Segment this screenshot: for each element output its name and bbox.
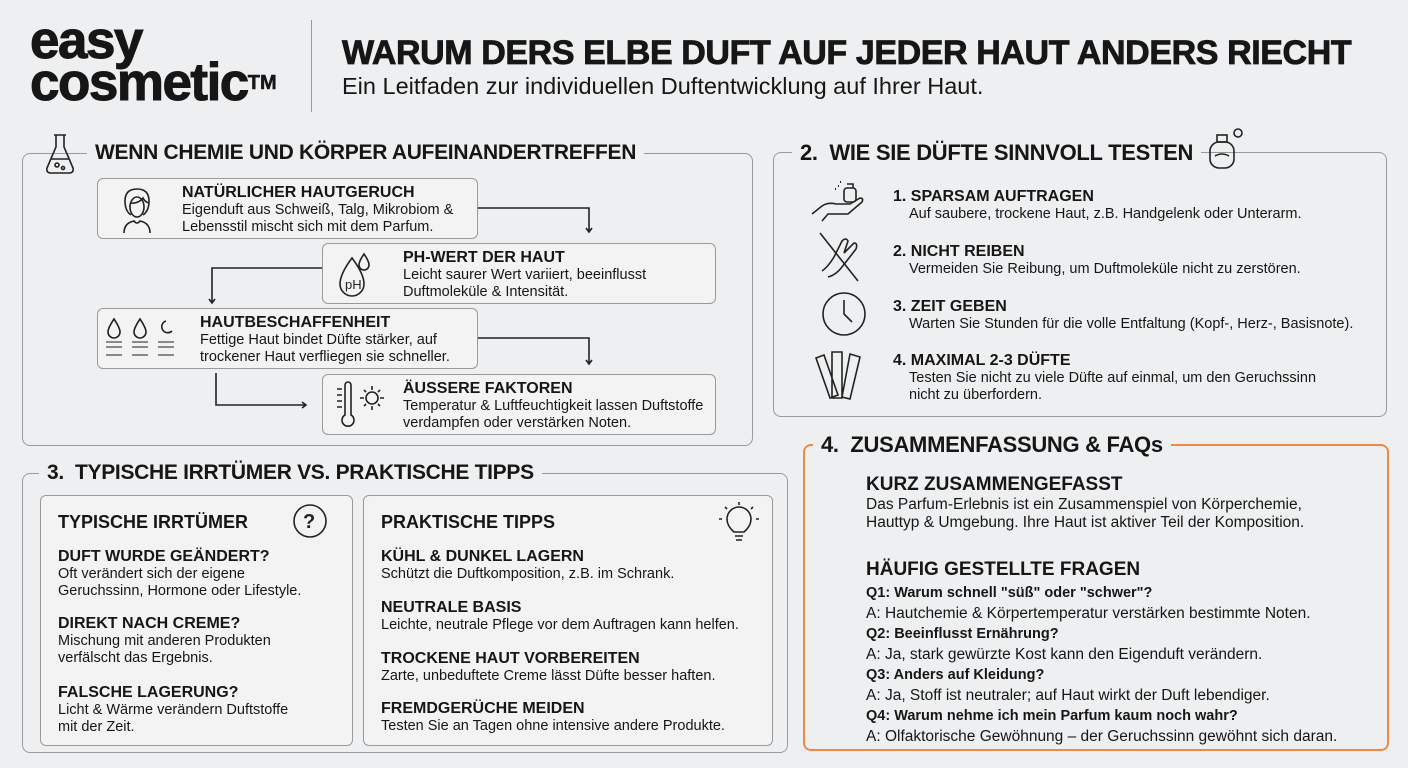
- faq: [866, 558, 1337, 744]
- step 4: [815, 351, 1316, 403]
- box: ph: PH-WERT DER HAUT: [403, 249, 565, 266]
- box: hautgeruch: Eigenduft aus Schweiß, Talg, Mikrobiom &: [182, 202, 453, 218]
- heading 2: 2. WIE SIE DÜFTE SINNVOLL TESTEN: [800, 140, 1193, 165]
- box: irrtuemer: DUFT WURDE GEÄNDERT?: [58, 548, 270, 565]
- logo: easy: [30, 11, 142, 70]
- step 1: [812, 181, 1302, 222]
- box: irrtuemer: FALSCHE LAGERUNG?: [58, 684, 238, 701]
- summary: Hauttyp & Umgebung. Ihre Haut ist aktiver Teil der Komposition.: [866, 514, 1304, 531]
- step 4: Testen Sie nicht zu viele Düfte auf einmal, um den Geruchssinn: [909, 370, 1316, 386]
- box: tipps: PRAKTISCHE TIPPS: [381, 512, 555, 532]
- summary: Das Parfum-Erlebnis ist ein Zusammenspiel von Körperchemie,: [866, 496, 1302, 513]
- box: irrtuemer: [40, 495, 353, 746]
- box: irrtuemer: Licht & Wärme verändern Duftstoffe: [58, 702, 288, 718]
- box: hautbeschaffenheit: trockener Haut verfliegen sie schneller.: [200, 349, 450, 365]
- heading 3: 3. TYPISCHE IRRTÜMER VS. PRAKTISCHE TIPPS: [47, 461, 534, 484]
- box: tipps: Testen Sie an Tagen ohne intensive andere Produkte.: [381, 718, 725, 734]
- faq: Q1: Warum schnell "süß" oder "schwer"?: [866, 585, 1152, 601]
- box: aeussere faktoren: [322, 374, 716, 435]
- faq: A: Ja, Stoff ist neutraler; auf Haut wirkt der Duft lebendiger.: [866, 686, 1270, 704]
- summary: [866, 474, 1304, 531]
- summary: KURZ ZUSAMMENGEFASST: [866, 474, 1122, 495]
- steps: [812, 181, 1353, 403]
- faq: A: Olfaktorische Gewöhnung – der Geruchssinn gewöhnt sich daran.: [866, 728, 1337, 744]
- step 1: 1. SPARSAM AUFTRAGEN: [893, 188, 1094, 205]
- box: tipps: Schützt die Duftkomposition, z.B. im Schrank.: [381, 566, 674, 582]
- panel 2: [773, 152, 1387, 417]
- box: hautbeschaffenheit: [97, 308, 478, 369]
- box: irrtuemer: Geruchssinn, Hormone oder Lifestyle.: [58, 583, 301, 599]
- box: tipps: KÜHL & DUNKEL LAGERN: [381, 548, 584, 565]
- box: tipps: Leichte, neutrale Pflege vor dem Auftragen kann helfen.: [381, 617, 739, 633]
- box: irrtuemer: DIREKT NACH CREME?: [58, 615, 240, 632]
- box: tipps: TROCKENE HAUT VORBEREITEN: [381, 650, 640, 667]
- step 3: 3. ZEIT GEBEN: [893, 298, 1007, 315]
- logo: [30, 11, 277, 112]
- box: ph: pH: [345, 277, 362, 292]
- step 4: 4. MAXIMAL 2-3 DÜFTE: [893, 352, 1070, 369]
- box: irrtuemer: mit der Zeit.: [58, 719, 135, 735]
- box: irrtuemer: TYPISCHE IRRTÜMER: [58, 512, 248, 532]
- step 3: [822, 292, 1353, 336]
- step 3: Warten Sie Stunden für die volle Entfaltung (Kopf-, Herz-, Basisnote).: [909, 316, 1353, 332]
- box: hautgeruch: Lebensstil mischt sich mit dem Parfum.: [182, 219, 433, 235]
- box: aeussere faktoren: ÄUSSERE FAKTOREN: [403, 380, 573, 397]
- step 2: 2. NICHT REIBEN: [893, 243, 1025, 260]
- box: hautgeruch: NATÜRLICHER HAUTGERUCH: [182, 184, 415, 201]
- box: hautbeschaffenheit: HAUTBESCHAFFENHEIT: [200, 314, 390, 331]
- box: irrtuemer: verfälscht das Ergebnis.: [58, 650, 213, 666]
- faq: A: Hautchemie & Körpertemperatur verstärken bestimmte Noten.: [866, 604, 1311, 622]
- box: hautbeschaffenheit: Fettige Haut bindet Düfte stärker, auf: [200, 332, 437, 348]
- faq: HÄUFIG GESTELLTE FRAGEN: [866, 559, 1140, 580]
- icon: perfume bottle: [1209, 128, 1243, 169]
- logo: cosmeticTM: [30, 53, 277, 112]
- panel 1: [22, 153, 753, 446]
- panel 3: [22, 473, 788, 753]
- box: tipps: [363, 495, 773, 746]
- box: irrtuemer: Mischung mit anderen Produkten: [58, 633, 271, 649]
- box: ph: Duftmoleküle & Intensität.: [403, 284, 568, 300]
- step 2: [819, 232, 1301, 282]
- heading 4: 4. ZUSAMMENFASSUNG & FAQs: [821, 432, 1163, 457]
- box: tipps: FREMDGERÜCHE MEIDEN: [381, 700, 585, 717]
- box: irrtuemer: Oft verändert sich der eigene: [58, 566, 245, 582]
- faq: A: Ja, stark gewürzte Kost kann den Eigenduft verändern.: [866, 646, 1262, 662]
- box: ph: Leicht saurer Wert variiert, beeinflusst: [403, 267, 646, 283]
- title: WARUM DERS ELBE DUFT AUF JEDER HAUT ANDERS RIECHT: [342, 34, 1351, 72]
- box: tipps: NEUTRALE BASIS: [381, 599, 521, 616]
- box: ph: [322, 243, 716, 304]
- faq: Q3: Anders auf Kleidung?: [866, 667, 1044, 683]
- faq: Q2: Beeinflusst Ernährung?: [866, 626, 1059, 642]
- box: aeussere faktoren: verdampfen oder verstärken Noten.: [403, 415, 631, 431]
- box: irrtuemer: ?: [303, 511, 315, 533]
- step 4: nicht zu überfordern.: [909, 387, 1042, 403]
- box: aeussere faktoren: Temperatur & Luftfeuchtigkeit lassen Duftstoffe: [403, 398, 703, 414]
- heading 1: WENN CHEMIE UND KÖRPER AUFEINANDERTREFFEN: [95, 141, 636, 164]
- step 1: Auf saubere, trockene Haut, z.B. Handgelenk oder Unterarm.: [909, 206, 1302, 222]
- box: tipps: Zarte, unbeduftete Creme lässt Düfte besser haften.: [381, 668, 715, 684]
- panel 4: [803, 444, 1389, 751]
- step 2: Vermeiden Sie Reibung, um Duftmoleküle nicht zu zerstören.: [909, 261, 1301, 277]
- subtitle: Ein Leitfaden zur individuellen Duftentwicklung auf Ihrer Haut.: [342, 73, 983, 99]
- arrows: [208, 207, 593, 409]
- icon: flask: [46, 134, 74, 174]
- faq: Q4: Warum nehme ich mein Parfum kaum noch wahr?: [866, 708, 1238, 724]
- box: hautgeruch: [97, 178, 478, 239]
